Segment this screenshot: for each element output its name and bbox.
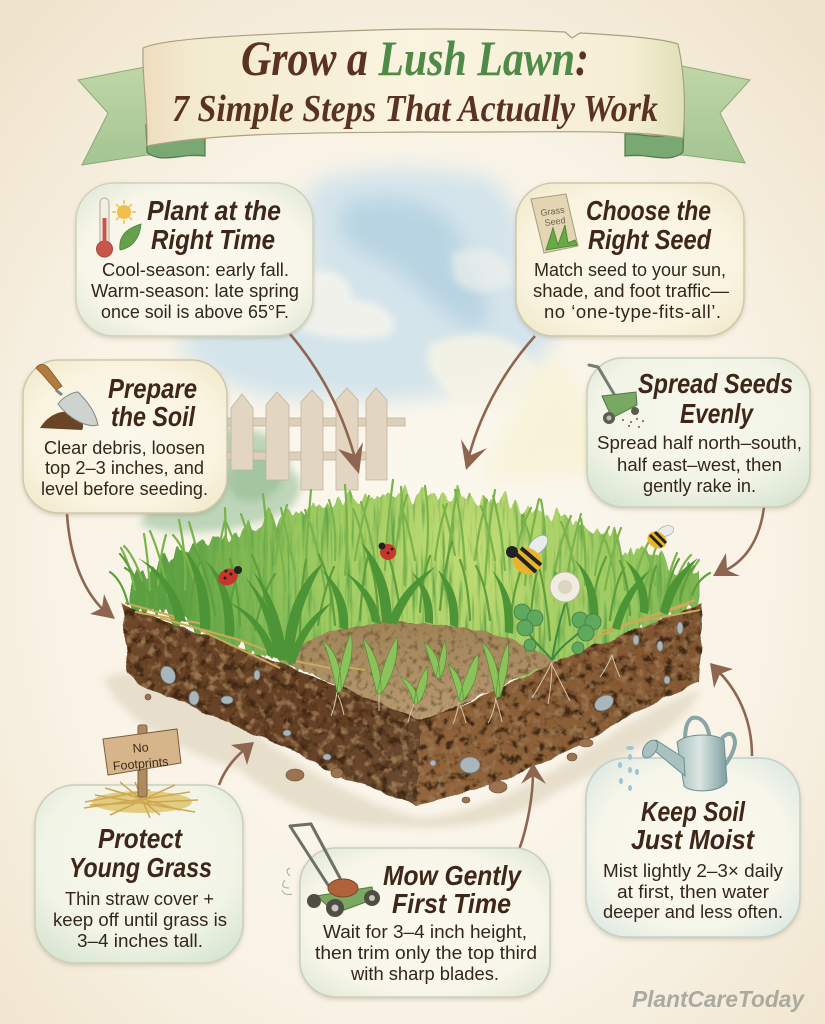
body text: gently rake in. (643, 475, 756, 496)
icon: lawn mower (282, 824, 380, 917)
body text: half east–west, then (617, 454, 782, 475)
crumbs on the ground (145, 694, 593, 803)
heading: Right Time (151, 224, 275, 255)
panel: prepare the soil (23, 360, 227, 513)
icon: seed packet: Seed (544, 215, 566, 228)
icon: thermometer, sun and leaf (96, 198, 141, 257)
straw along edges (125, 600, 700, 670)
icon: watering can (618, 718, 735, 791)
body text (603, 860, 784, 922)
soil underlay (281, 640, 554, 725)
panel: protect young grass (35, 725, 243, 963)
body text: Spread half north–south, (597, 432, 802, 453)
heading (108, 373, 197, 432)
body text: level before seeding. (41, 478, 208, 499)
panel: spread seeds evenly (587, 358, 810, 507)
parchment banner (143, 29, 684, 146)
body text: no ‘one-type-fits-all’. (544, 301, 721, 322)
ground shadow under soil block (104, 674, 700, 828)
body text: then trim only the top third (315, 942, 537, 963)
arrow: protect to block (219, 742, 254, 785)
body text (53, 888, 227, 951)
body text: Cool-season: early fall. (102, 259, 289, 280)
bushes behind fence (140, 427, 300, 533)
body text: Thin straw cover + (65, 888, 214, 909)
lawn mass (122, 494, 700, 685)
soil block illustration (110, 480, 710, 805)
arrow: water to block (710, 663, 752, 756)
heading: Prepare (108, 373, 197, 404)
heading: Keep Soil (641, 796, 746, 827)
panel: plant at the right time (76, 183, 313, 336)
arrows (67, 334, 764, 850)
bee small (644, 524, 675, 552)
heading: Plant at the (147, 195, 281, 226)
heading: Young Grass (69, 852, 212, 883)
arrow: seed to lawn (461, 336, 535, 470)
ladybug left (216, 566, 242, 588)
heading (631, 796, 755, 855)
heading: Protect (98, 823, 183, 854)
icon: seed packet: Grass (540, 205, 566, 218)
icon: no footprints sign on straw: Footprints (112, 755, 169, 773)
heading (383, 860, 522, 919)
title line 2: 7 Simple Steps That Actually Work (172, 88, 658, 130)
body text (533, 259, 729, 322)
heading (586, 195, 712, 255)
bee large (506, 532, 551, 580)
icon: seed spreader (589, 365, 644, 427)
right ribbon tail (625, 66, 750, 163)
body text: Warm-season: late spring (91, 280, 299, 301)
roots (331, 655, 620, 724)
body text (91, 259, 299, 322)
panel: choose the right seed (516, 183, 744, 336)
body text: Match seed to your sun, (534, 259, 726, 280)
pebbles (158, 622, 683, 773)
body text: Clear debris, loosen (44, 437, 205, 458)
arrow: spread to block (713, 507, 764, 576)
arrow: soil to block (67, 514, 115, 619)
icon: no footprints sign on straw (84, 725, 198, 818)
seedling soil surface (281, 622, 554, 720)
soil right face (417, 603, 703, 805)
heading: Just Moist (631, 824, 755, 855)
body text: shade, and foot traffic— (533, 280, 729, 301)
body text (315, 921, 537, 984)
panel: mow gently first time (282, 824, 550, 997)
heading (69, 823, 212, 883)
heading: Spread Seeds (638, 368, 793, 399)
icon: trowel with soil (36, 364, 98, 430)
heading: Evenly (680, 398, 754, 429)
body text: at first, then water (617, 881, 769, 902)
body text: top 2–3 inches, and (45, 457, 204, 478)
watercolor sky (175, 168, 640, 480)
soil faces (122, 603, 703, 805)
body text (41, 437, 208, 499)
arrow: plant to lawn (290, 334, 363, 474)
body text: once soil is above 65°F. (101, 301, 289, 322)
panel: keep soil just moist (586, 718, 800, 937)
body text (597, 432, 802, 496)
icon: seed packet (531, 194, 578, 253)
clover plant (514, 572, 601, 660)
body text: keep off until grass is (53, 909, 227, 930)
soil left face (122, 603, 421, 805)
watermark: PlantCareToday (632, 986, 805, 1012)
heading (147, 195, 281, 255)
back grass blades (121, 480, 699, 600)
heading (638, 368, 793, 429)
arrow: mow to block (519, 763, 546, 850)
body text: with sharp blades. (350, 963, 499, 984)
ladybug middle (378, 542, 396, 560)
title banner ribbon (78, 29, 750, 165)
body text: deeper and less often. (603, 901, 783, 922)
heading: Mow Gently (383, 860, 522, 891)
heading: the Soil (111, 401, 196, 432)
heading: Choose the (586, 195, 711, 226)
heading: Right Seed (588, 224, 712, 255)
front grass clumps (138, 542, 698, 664)
left ribbon tail (78, 66, 205, 165)
heading: First Time (392, 888, 511, 919)
picket fence (225, 388, 405, 490)
body text: Wait for 3–4 inch height, (323, 921, 527, 942)
icon: no footprints sign on straw: No (132, 740, 149, 756)
seedlings (322, 633, 509, 704)
title line 1: Grow a Lush Lawn: (241, 30, 589, 86)
body text: Mist lightly 2–3× daily (603, 860, 784, 881)
body text: 3–4 inches tall. (77, 930, 203, 951)
